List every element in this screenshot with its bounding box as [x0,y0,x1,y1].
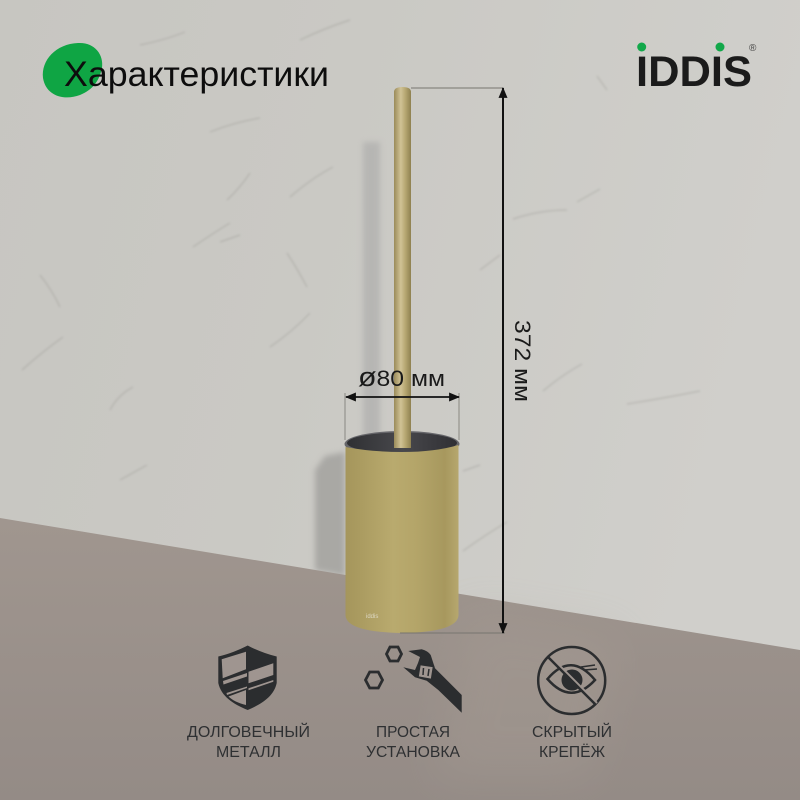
dimension: diameter 80 mm [345,362,459,440]
shadow of the cup on the wall [315,452,345,576]
title text: Характеристики [64,54,329,94]
feature: durable metal: МЕТАЛЛ [216,744,281,761]
floor [0,518,800,800]
cup body [346,445,458,633]
label: СКРЫТЫЙ [532,722,612,741]
feature: hidden mount [532,647,612,761]
shadow of the stem on the wall [363,142,380,440]
feature: hidden mount: КРЕПЁЖ [539,743,605,761]
green blob [43,43,102,97]
icon: shield [218,646,277,710]
dimension: height 372 mm [400,88,535,633]
label: ДОЛГОВЕЧНЫЙ [187,722,310,741]
label: ПРОСТАЯ [376,724,450,741]
dimension: height 372 mm: 372 мм [510,320,535,402]
product: toilet brush holder [344,87,460,633]
icon: wrench and nuts [366,647,462,713]
floor highlight [430,615,620,780]
cup inner rim [344,431,460,457]
brand mark on cup: iddis [366,614,378,620]
title with green blob [43,43,329,97]
feature: simple installation: УСТАНОВКА [366,744,460,761]
brush stem [394,87,411,448]
feature: simple installation [366,647,462,761]
feature: durable metal [187,646,310,761]
logo: IDDIS: IDDIS [636,48,752,96]
icon: crossed-out eye [538,647,605,714]
dimension: diameter 80 mm: ø80 мм [358,362,445,392]
logo: IDDIS: ® [749,43,757,54]
